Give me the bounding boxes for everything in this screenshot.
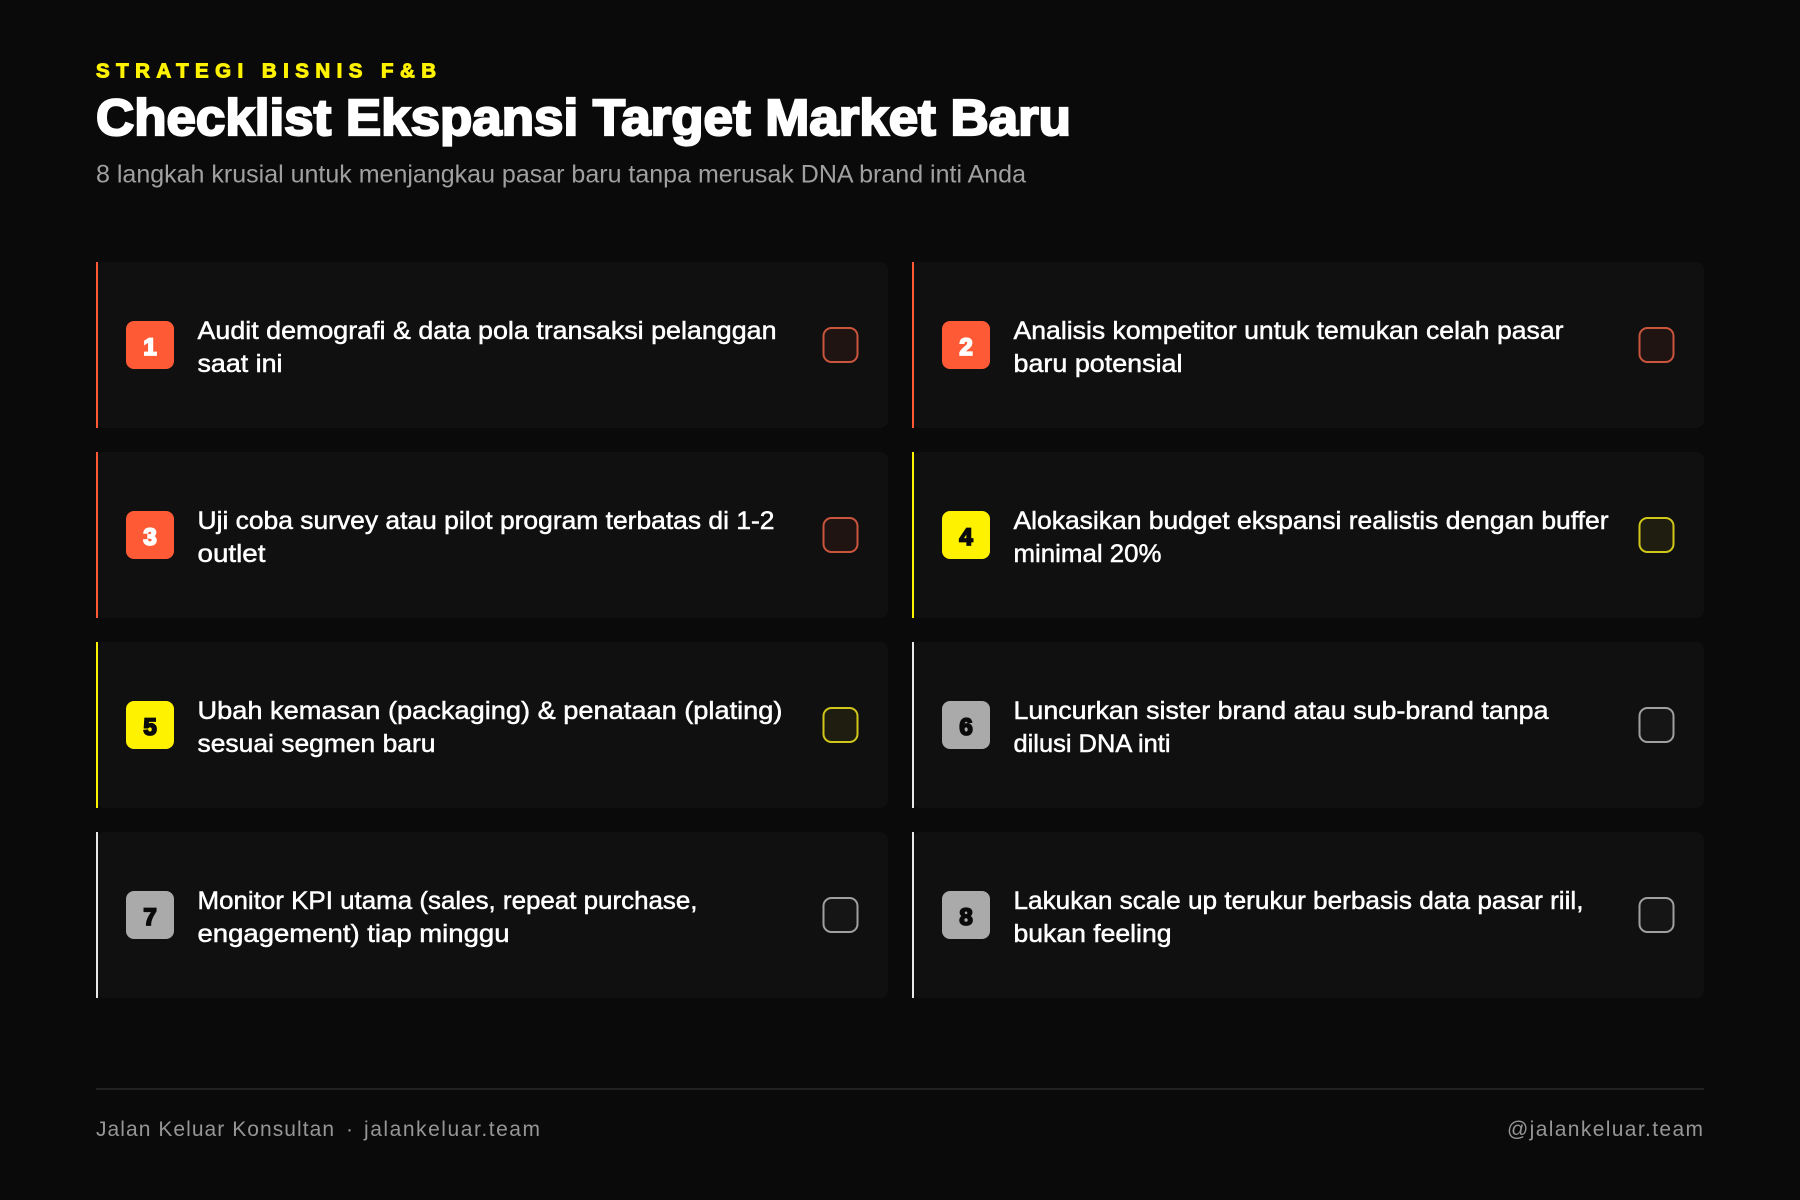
header	[96, 60, 1071, 188]
footer right handle: @jalankeluar.team	[1507, 1118, 1703, 1141]
text 1: saat ini	[198, 350, 282, 378]
text 4: Alokasikan budget ekspansi realistis dengan buffer	[1014, 507, 1608, 535]
text 6: Luncurkan sister brand atau sub-brand tanpa	[1014, 697, 1549, 725]
badge 2	[942, 321, 990, 369]
card 8	[912, 832, 1704, 998]
text 2: Analisis kompetitor untuk temukan celah pasar	[1014, 317, 1564, 345]
text 8: Lakukan scale up terukur berbasis data pasar riil,	[1014, 887, 1584, 915]
badge 8: 8	[959, 904, 973, 931]
checkbox 2	[1640, 328, 1674, 362]
badge 7	[126, 891, 174, 939]
text 4: minimal 20%	[1014, 540, 1162, 568]
text 7	[198, 887, 698, 948]
text 6	[1014, 697, 1549, 758]
badge 1: 1	[143, 334, 157, 361]
text 4	[1014, 507, 1608, 568]
subtitle: 8 langkah krusial untuk menjangkau pasar baru tanpa merusak DNA brand inti Anda	[96, 160, 1026, 188]
card 7	[96, 832, 888, 998]
badge 3	[126, 511, 174, 559]
title: Checklist Ekspansi Target Market Baru	[96, 89, 1071, 146]
badge 3: 3	[143, 524, 157, 551]
card 1	[96, 262, 888, 428]
text 1	[198, 317, 776, 378]
badge 4: 4	[959, 524, 973, 551]
card 6	[912, 642, 1704, 808]
footer left credit: ·	[346, 1118, 353, 1141]
card 2	[912, 262, 1704, 428]
checkbox 4	[1640, 518, 1674, 552]
badge 7: 7	[143, 904, 157, 931]
badge 5: 5	[143, 714, 157, 741]
footer left credit: Jalan Keluar Konsultan	[96, 1118, 334, 1141]
badge 2: 2	[959, 334, 973, 361]
checkbox 6	[1640, 708, 1674, 742]
text 3	[198, 507, 774, 568]
checkbox 7	[824, 898, 858, 932]
text 5: sesuai segmen baru	[198, 730, 436, 758]
text 7: Monitor KPI utama (sales, repeat purchase,	[198, 887, 698, 915]
text 8	[1014, 887, 1584, 948]
badge 5	[126, 701, 174, 749]
card 5	[96, 642, 888, 808]
checkbox 8	[1640, 898, 1674, 932]
card 3	[96, 452, 888, 618]
checkbox 5	[824, 708, 858, 742]
badge 8	[942, 891, 990, 939]
text 3: outlet	[198, 540, 266, 568]
text 8: bukan feeling	[1014, 920, 1172, 948]
text 5	[198, 697, 782, 758]
text 2	[1014, 317, 1564, 378]
eyebrow: STRATEGI BISNIS F&B	[96, 60, 436, 82]
text 6: dilusi DNA inti	[1014, 730, 1170, 758]
text 2: baru potensial	[1014, 350, 1182, 378]
badge 4	[942, 511, 990, 559]
badge 6	[942, 701, 990, 749]
footer left credit: jalankeluar.team	[363, 1118, 540, 1141]
text 7: engagement) tiap minggu	[198, 920, 510, 948]
badge 6: 6	[959, 714, 973, 741]
checkbox 1	[824, 328, 858, 362]
checklist grid	[96, 262, 1704, 998]
text 3: Uji coba survey atau pilot program terbatas di 1-2	[198, 507, 774, 535]
card 4	[912, 452, 1704, 618]
text 1: Audit demografi & data pola transaksi pelanggan	[198, 317, 776, 345]
footer	[96, 1118, 1703, 1141]
footer left credit	[96, 1118, 540, 1141]
text 5: Ubah kemasan (packaging) & penataan (plating)	[198, 697, 782, 725]
checkbox 3	[824, 518, 858, 552]
badge 1	[126, 321, 174, 369]
